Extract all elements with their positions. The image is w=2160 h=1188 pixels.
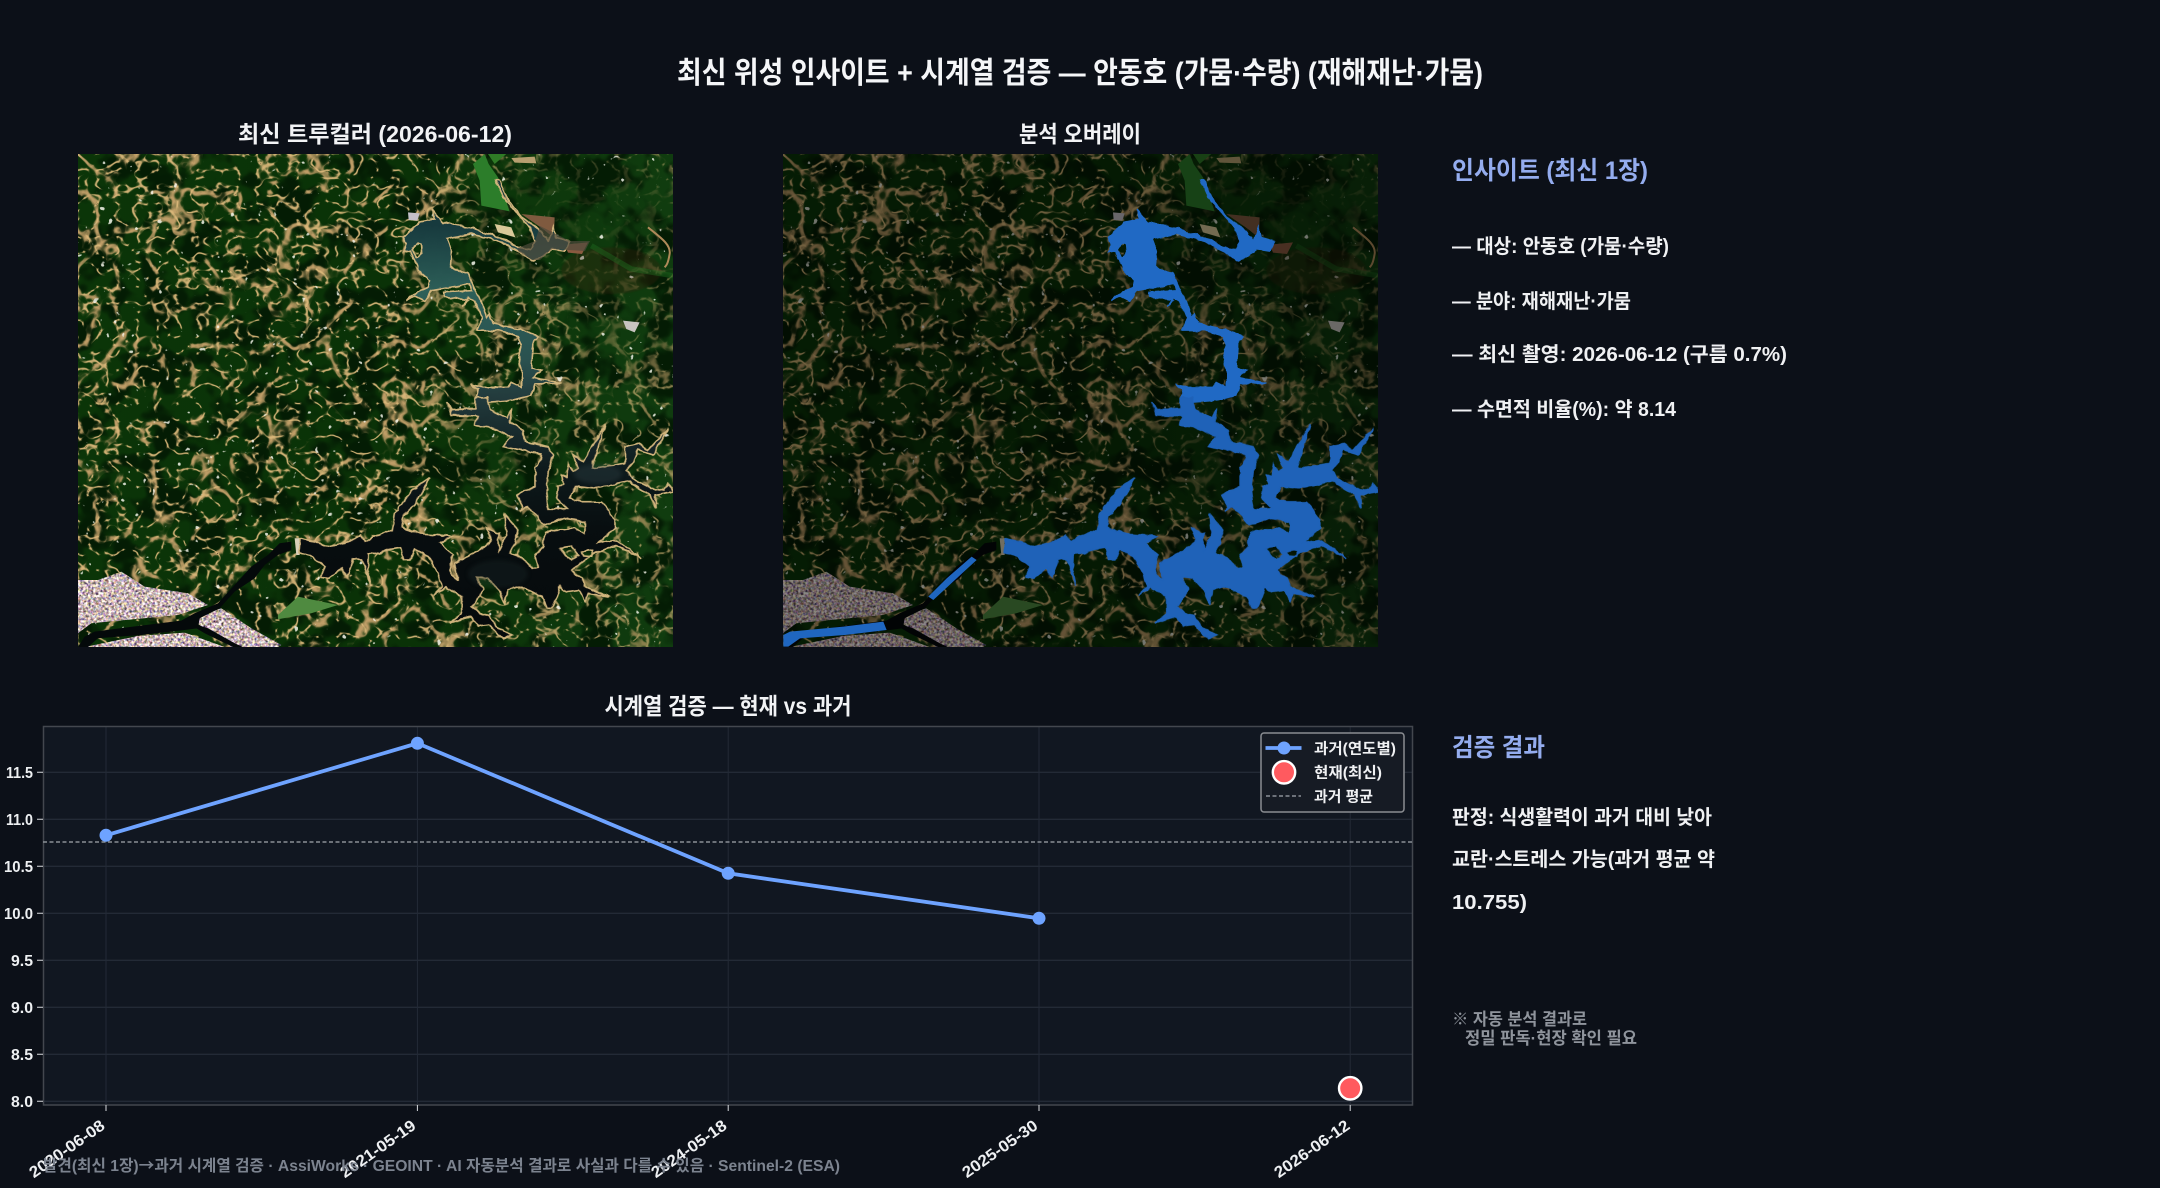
insight: latest capture: — 최신 촬영: 2026-06-12 (구름 0.7%) — [1452, 343, 1787, 366]
y axis labels: 8.0 — [11, 1094, 33, 1111]
x axis labels: 2021-05-19 — [337, 1117, 419, 1182]
verdict text — [1452, 806, 1715, 914]
title: 최신 위성 인사이트 + 시계열 검증 — 안동호 (가뭄·수량) (재해재난·가뭄) — [677, 57, 1483, 90]
legend: 과거(연도별) — [1314, 740, 1396, 758]
x axis labels: 2024-05-18 — [648, 1117, 730, 1182]
panel: analysis overlay image — [783, 154, 1378, 648]
y axis labels: 8.5 — [11, 1047, 33, 1064]
legend: 현재(최신) — [1314, 764, 1382, 782]
heading: analysis overlay: 분석 오버레이 — [1019, 121, 1141, 147]
disclaimer note: ※ 자동 분석 결과로 — [1452, 1005, 1587, 1030]
y axis labels: 9.5 — [11, 953, 33, 970]
x axis labels: 2026-06-12 — [1271, 1117, 1353, 1182]
verdict text: 판정: 식생활력이 과거 대비 낮아 — [1452, 806, 1712, 829]
heading: insight: 인사이트 (최신 1장) — [1452, 157, 1648, 185]
y axis labels: 11.0 — [6, 812, 33, 829]
panel: true colour satellite image — [78, 154, 673, 648]
mean reference line — [43, 841, 1412, 843]
verdict text: 10.755) — [1452, 892, 1527, 914]
chart title: 시계열 검증 — 현재 vs 과거 — [604, 693, 852, 719]
verdict text: 교란·스트레스 가능(과거 평균 약 — [1452, 848, 1715, 871]
current value marker — [1339, 1077, 1361, 1100]
y axis labels — [4, 765, 1350, 1111]
legend — [1261, 733, 1404, 812]
y axis labels: 10.5 — [4, 859, 33, 876]
line chart: time series — [4, 726, 1412, 1182]
x axis labels: 2020-06-08 — [26, 1117, 108, 1182]
insight: water ratio: — 수면적 비율(%): 약 8.14 — [1452, 398, 1677, 421]
x axis labels — [26, 1117, 1353, 1182]
past series line — [100, 737, 1046, 925]
disclaimer note: 정밀 판독·현장 확인 필요 — [1465, 1029, 1637, 1048]
y axis labels: 11.5 — [6, 765, 33, 782]
insight: field: — 분야: 재해재난·가뭄 — [1452, 290, 1631, 313]
legend: 과거 평균 — [1314, 788, 1373, 806]
y axis labels: 9.0 — [11, 1000, 33, 1017]
panel: insight text — [1452, 157, 1787, 421]
heading: true colour image: 최신 트루컬러 (2026-06-12) — [238, 121, 512, 147]
insight: target: — 대상: 안동호 (가뭄·수량) — [1452, 235, 1669, 258]
heading: validation result: 검증 결과 — [1452, 734, 1545, 762]
y axis labels: 10.0 — [4, 906, 33, 923]
disclaimer note — [1452, 1005, 1637, 1048]
footer note: 발견(최신 1장)→과거 시계열 검증 · AssiWorks · GEOINT · AI 자동분석 결과로 사실과 다를 수 있음 · Sentinel-2 (ESA) — [43, 1152, 840, 1176]
panel: validation result — [1452, 734, 1715, 1048]
x axis labels: 2025-05-30 — [959, 1117, 1041, 1182]
